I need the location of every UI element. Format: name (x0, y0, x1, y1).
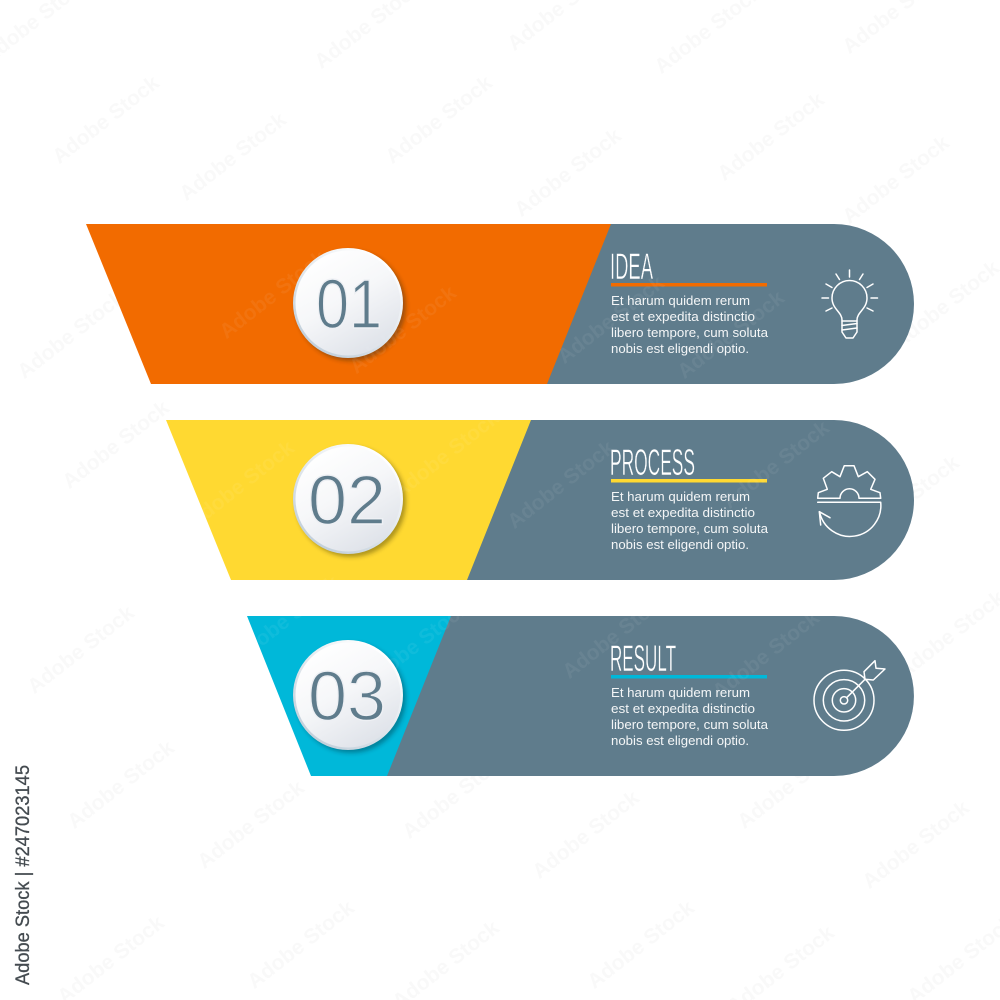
foreground watermark (183, 246, 834, 703)
grey rounded panel 2 (460, 420, 914, 580)
foreground watermark: Adobe Stock (673, 286, 789, 383)
panel: step 3 result (247, 616, 914, 776)
background watermark: Adobe Stock (243, 896, 359, 993)
background watermark: Adobe Stock (58, 396, 174, 493)
grey rounded panel 1 (540, 224, 914, 384)
background watermark: Adobe Stock (175, 108, 291, 205)
yellow trapezoid (166, 420, 531, 580)
text block: Et harum quidem rerum (611, 489, 750, 504)
text block: est et expedita distinctio (611, 701, 755, 716)
accent underline (611, 479, 767, 482)
text block: Et harum quidem rerum (611, 685, 750, 700)
icon: target with arrow (814, 661, 885, 730)
background watermark: Adobe Stock (48, 71, 164, 168)
number badge 02: 02 (308, 461, 386, 539)
panel: step 1 idea (86, 224, 914, 384)
panel: step 3 result: RESULT (610, 638, 676, 679)
foreground watermark: Adobe Stock (718, 416, 834, 513)
text block (611, 685, 769, 748)
icon: gear with cycle arrow (818, 466, 881, 536)
foreground watermark: Adobe Stock (358, 596, 474, 693)
background watermark: Adobe Stock (381, 71, 497, 168)
panel: step 1 idea: IDEA (610, 246, 653, 287)
panel: step 2 process (166, 420, 914, 580)
number badge 01: 01 (316, 265, 382, 343)
foreground watermark: Adobe Stock (388, 406, 504, 503)
background watermark: Adobe Stock (713, 88, 829, 185)
background watermark: Adobe Stock (13, 286, 129, 383)
background watermark: Adobe Stock (583, 896, 699, 993)
icon: light bulb (822, 270, 878, 338)
background watermark: Adobe Stock (733, 736, 849, 833)
accent underline (611, 283, 767, 286)
foreground watermark: Adobe Stock (228, 571, 344, 668)
foreground watermark: Adobe Stock (345, 281, 461, 378)
background watermark: Adobe Stock (858, 796, 974, 893)
background watermark: Adobe Stock (193, 776, 309, 873)
text block: est et expedita distinctio (611, 309, 755, 324)
panel: step 2 process: PROCESS (610, 442, 695, 483)
stock id caption: Adobe Stock | #247023145 (13, 765, 34, 985)
number badge 01 (293, 248, 406, 361)
foreground watermark: Adobe Stock (183, 436, 299, 533)
text block (611, 489, 769, 552)
foreground watermark: Adobe Stock (503, 436, 619, 533)
text block (611, 293, 769, 356)
background watermark: Adobe Stock (510, 124, 626, 221)
text block: Et harum quidem rerum (611, 293, 750, 308)
background watermark: Adobe Stock (23, 601, 139, 698)
grey rounded panel 3 (380, 616, 914, 776)
text block: libero tempore, cum soluta (611, 521, 769, 536)
number badge 03: 03 (308, 657, 386, 735)
text block: libero tempore, cum soluta (611, 325, 769, 340)
accent underline (611, 675, 767, 678)
text block: est et expedita distinctio (611, 505, 755, 520)
foreground watermark: Adobe Stock (558, 586, 674, 683)
background watermark: Adobe Stock (848, 451, 964, 548)
background watermark: Adobe Stock (838, 131, 954, 228)
background watermark: Adobe Stock (398, 746, 514, 843)
text block: libero tempore, cum soluta (611, 717, 769, 732)
foreground watermark: Adobe Stock (215, 246, 331, 343)
orange trapezoid (86, 224, 611, 384)
foreground watermark: Adobe Stock (553, 271, 669, 368)
background watermark: Adobe Stock (63, 736, 179, 833)
foreground watermark: Adobe Stock (708, 606, 824, 703)
cyan trapezoid (247, 616, 451, 776)
background watermark: Adobe Stock (528, 786, 644, 883)
text block: nobis est eligendi optio. (611, 341, 749, 356)
number badge 02 (293, 444, 406, 557)
text block: nobis est eligendi optio. (611, 537, 749, 552)
text block: nobis est eligendi optio. (611, 733, 749, 748)
number badge 03 (293, 640, 406, 753)
